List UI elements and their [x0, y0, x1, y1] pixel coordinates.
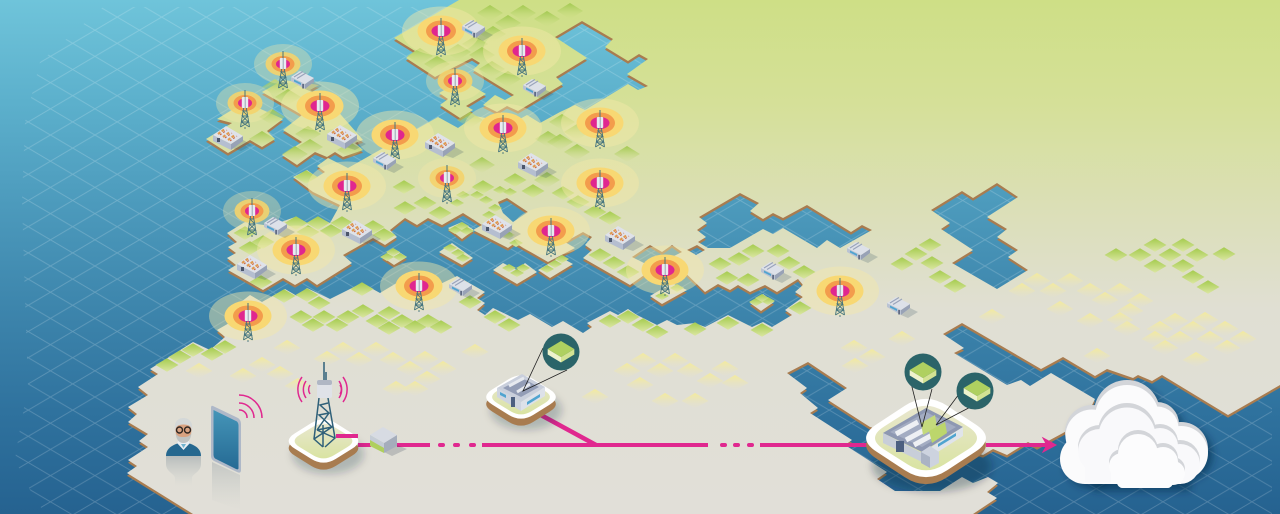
- callout: edge site: [523, 334, 580, 391]
- cloud: [1060, 380, 1213, 491]
- arrow head: [1043, 438, 1056, 452]
- tower coverage 16: [380, 262, 458, 312]
- tower coverage 8: [464, 104, 542, 154]
- tower coverage 17: [626, 246, 704, 296]
- warehouses: [213, 125, 644, 280]
- platform: data centre: [866, 399, 992, 492]
- tower coverage 6: [426, 61, 484, 107]
- router box: [370, 427, 407, 456]
- magenta stub: [336, 434, 358, 438]
- tower coverage 12: [561, 158, 639, 209]
- tower coverage 9: [561, 98, 639, 149]
- tower coverage 7: [356, 110, 434, 161]
- tower coverage 15: [512, 206, 590, 257]
- tower coverage 5: [483, 26, 561, 77]
- tower coverage 19: [801, 266, 879, 317]
- tower coverage 2: [216, 83, 274, 129]
- main tower: [314, 362, 335, 447]
- tower coverage 10: [308, 162, 386, 212]
- northern land tiles: [249, 3, 640, 188]
- tower coverage 14: [257, 226, 335, 276]
- small buildings: [264, 20, 918, 318]
- user: [166, 418, 201, 486]
- tower coverage 13: [223, 191, 281, 237]
- callout: data centre A: [904, 354, 942, 427]
- platform: tower: [289, 419, 364, 474]
- tower coverage 4: [402, 6, 480, 57]
- callout: data centre B: [936, 372, 994, 425]
- tower coverage 11: [418, 158, 476, 204]
- tower coverage 1: [254, 44, 312, 90]
- phone signal: [239, 395, 262, 418]
- green land tiles: [156, 170, 1236, 372]
- fibre line: [358, 408, 1047, 445]
- yellow land tiles: [186, 273, 1256, 408]
- tower coverage 3: [281, 82, 359, 132]
- tower coverage 18: [209, 292, 287, 342]
- platform: edge site: [486, 374, 562, 430]
- tower signal: [298, 377, 347, 402]
- phone: [211, 406, 241, 510]
